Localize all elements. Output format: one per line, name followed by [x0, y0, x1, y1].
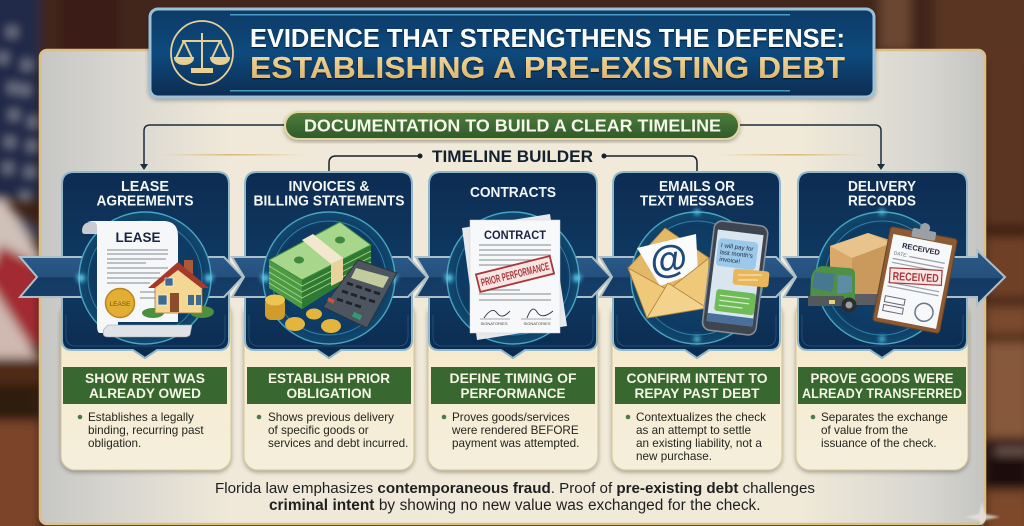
outer connector lines	[140, 125, 885, 170]
bullet text: were rendered BEFORE	[451, 424, 579, 437]
icon: contract with stamp	[462, 214, 567, 340]
panel: emails or text messages	[600, 172, 795, 470]
icon: contract with stamp: CONTRACT	[484, 230, 546, 242]
title banner	[150, 9, 874, 97]
card title: TEXT MESSAGES	[640, 192, 754, 210]
footer statement: Florida law emphasizes contemporaneous fraud. Proof of pre-existing debt challenges	[215, 480, 815, 497]
green subtitle band	[247, 367, 411, 404]
bullet text	[257, 411, 408, 450]
emblem ring	[261, 212, 397, 344]
icon: contract with stamp: PRIOR PERFORMANCE	[480, 261, 551, 289]
icon: delivery truck with box	[808, 233, 892, 312]
icon: scales of justice	[171, 21, 233, 85]
card title: EMAILS OR	[659, 178, 735, 195]
bullet text: Shows previous delivery	[268, 411, 394, 424]
documentation heading pill: DOCUMENTATION TO BUILD A CLEAR TIMELINE	[304, 116, 721, 136]
bullet text: services and debt incurred.	[268, 437, 408, 450]
green subtitle band: ESTABLISH PRIOR	[268, 371, 390, 387]
bullet text: Establishes a legally	[88, 411, 194, 424]
bullet text: Contextualizes the check	[636, 411, 766, 424]
icon: lease scroll and house	[82, 221, 214, 337]
panel: delivery records	[784, 172, 1005, 470]
card title: INVOICES &	[288, 178, 370, 195]
title text	[250, 23, 845, 85]
icon: received clipboard: RECEIVED	[901, 241, 941, 257]
icon: lease scroll and house: LEASE	[115, 230, 161, 245]
process arrow segment	[600, 257, 795, 297]
emblem ring	[445, 212, 581, 344]
flag	[0, 0, 40, 200]
icon: envelope and phone: invoice!	[719, 256, 741, 266]
bullet text: of specific goods or	[268, 424, 369, 437]
icon: cash stack, calculator and coins	[265, 222, 397, 333]
card title	[96, 178, 194, 210]
timeline builder label: TIMELINE BUILDER	[432, 147, 593, 166]
icon: received clipboard: DATE:	[893, 250, 908, 259]
emblem ring	[816, 209, 948, 344]
green subtitle band: PROVE GOODS WERE	[810, 371, 954, 387]
bullet text	[442, 411, 579, 450]
bullet text: issuance of the check.	[821, 437, 937, 450]
footer statement	[215, 480, 815, 514]
green subtitle band: SHOW RENT WAS	[85, 371, 205, 387]
card title: RECORDS	[848, 192, 916, 210]
right wood	[985, 50, 1024, 225]
bullet text: binding, recurring past	[88, 424, 204, 437]
icon: contract with stamp: SIGNATORIES	[524, 321, 551, 326]
card title	[848, 178, 916, 210]
panel: lease agreements	[20, 172, 243, 470]
process arrow	[784, 250, 1005, 305]
bullet text	[626, 411, 766, 463]
process arrow segment	[20, 257, 243, 297]
icon: received clipboard: RECEIVED	[892, 271, 939, 285]
emblem ring	[631, 209, 763, 344]
bullet text: new purchase.	[636, 450, 712, 463]
documentation heading pill	[285, 112, 739, 139]
green subtitle band: ALREADY OWED	[89, 386, 201, 402]
bullet text: payment was attempted.	[452, 437, 579, 450]
green subtitle band: ALREADY TRANSFERRED	[802, 386, 962, 402]
icon: lease scroll and house: LEASE	[110, 301, 131, 308]
bullet text: an existing liability, not a	[636, 437, 762, 450]
green subtitle band: DEFINE TIMING OF	[450, 371, 577, 387]
green subtitle band: PERFORMANCE	[460, 386, 566, 402]
icon: envelope and phone	[628, 220, 770, 336]
card title: BILLING STATEMENTS	[254, 192, 404, 210]
card title	[640, 178, 754, 210]
icon: envelope and phone: @	[648, 237, 689, 283]
card title: CONTRACTS	[470, 184, 556, 201]
green subtitle band: REPAY PAST DEBT	[634, 386, 760, 402]
icon: envelope and phone: I will pay for	[721, 242, 754, 253]
process arrow segment	[232, 257, 427, 297]
card title: LEASE	[121, 178, 169, 195]
card title	[254, 178, 404, 210]
panel: contracts	[416, 172, 611, 470]
bullet text: obligation.	[88, 437, 141, 450]
bullet text	[78, 411, 204, 450]
card title: AGREEMENTS	[96, 192, 194, 210]
title text: ESTABLISHING A PRE-EXISTING DEBT	[250, 50, 845, 85]
bullet text: of value from the	[821, 424, 908, 437]
card title: DELIVERY	[848, 178, 916, 195]
green subtitle band	[798, 367, 966, 404]
green subtitle band: CONFIRM INTENT TO	[626, 371, 768, 387]
title text: EVIDENCE THAT STRENGTHENS THE DEFENSE:	[250, 23, 845, 53]
panel: invoices and billing statements	[232, 172, 427, 470]
bullet text: Proves goods/services	[452, 411, 570, 424]
footer statement: criminal intent by showing no new value was exchanged for the check.	[269, 497, 761, 514]
bullet text: Separates the exchange	[821, 411, 948, 424]
green subtitle band: OBLIGATION	[286, 386, 372, 402]
emblem ring	[77, 212, 213, 344]
bullet text: as an attempt to settle	[636, 424, 751, 437]
icon: contract with stamp: SIGNATORIES	[481, 321, 508, 326]
green subtitle band	[431, 367, 595, 404]
green subtitle band	[63, 367, 227, 404]
icon: received clipboard	[872, 217, 959, 334]
icon: envelope and phone: last month's	[720, 249, 753, 260]
bullet text	[811, 411, 948, 450]
process arrow segment	[416, 257, 611, 297]
timeline builder label	[329, 147, 697, 172]
corner sparkle	[965, 502, 1000, 526]
green subtitle band	[615, 367, 780, 404]
